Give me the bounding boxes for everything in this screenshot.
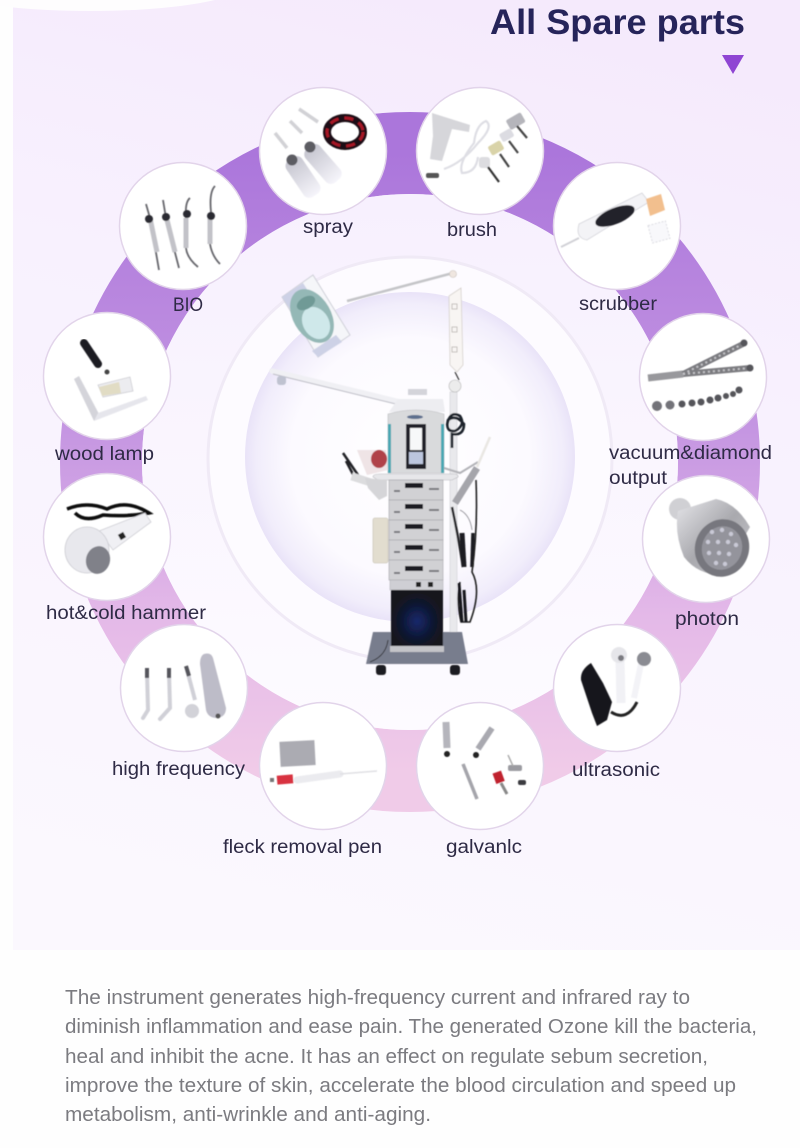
label: hot&cold hammer: hot&cold hammer: [46, 603, 207, 624]
label: wood lamp: wood lamp: [54, 444, 154, 465]
description paragraph: The instrument generates high-frequency current and infrared ray to: [65, 987, 690, 1009]
central lavender disc: [245, 292, 575, 622]
description paragraph: [65, 987, 757, 1126]
faint ring around centre: [208, 257, 612, 661]
fleck removal pen icon: [270, 740, 377, 785]
icon: down triangle: [722, 55, 744, 74]
pole: [450, 392, 457, 634]
hot and cold hammer icon: [65, 505, 151, 577]
galvanic circle: [416, 702, 544, 858]
description paragraph: diminish inflammation and ease pain. The generated Ozone kill the bacteria,: [65, 1016, 757, 1038]
vacuum and diamond circle: [609, 314, 772, 489]
label: photon: photon: [675, 609, 739, 630]
title: All Spare parts: [490, 3, 745, 42]
BIO circle: [120, 162, 246, 316]
label: vacuum&diamond output: [609, 443, 772, 489]
spray circle: [260, 88, 386, 238]
base with wheels: [366, 632, 468, 675]
top-left white arc: [0, 0, 245, 11]
spray icon: [275, 109, 363, 201]
scrubber circle: [554, 162, 680, 315]
description paragraph: improve the texture of skin, accelerate the blood circulation and speed up: [65, 1075, 736, 1097]
photon circle: [642, 476, 770, 630]
label: vacuum&diamond output: vacuum&diamond: [609, 443, 772, 464]
vacuum and diamond icon: [648, 340, 754, 411]
description paragraph: heal and inhibit the acne. It has an effect on regulate sebum secretion,: [65, 1046, 708, 1068]
label: vacuum&diamond output: output: [609, 468, 668, 489]
label: galvanlc: galvanlc: [446, 837, 522, 858]
tray: [373, 474, 458, 480]
purple ring: [101, 153, 719, 771]
control modules: [389, 480, 443, 580]
label: high frequency: high frequency: [112, 759, 246, 780]
left tools holder: [343, 450, 388, 563]
ultrasonic circle: [554, 624, 680, 781]
brush icon: [426, 112, 527, 182]
galvanic icon: [444, 722, 526, 799]
label: BIO: BIO: [173, 295, 203, 316]
high frequency circle: [112, 624, 248, 780]
right cords and handpieces: [444, 414, 490, 622]
ultrasonic icon: [581, 647, 651, 726]
scrubber icon: [561, 193, 670, 247]
inner area of ring: [142, 194, 678, 730]
photon icon: [669, 498, 757, 584]
label: fleck removal pen: fleck removal pen: [223, 837, 382, 858]
label: scrubber: scrubber: [579, 294, 658, 315]
lower panel and screen: [390, 580, 443, 647]
label: spray: spray: [303, 217, 354, 238]
magnifier lamp: [281, 275, 350, 357]
upper console: [388, 410, 444, 473]
wood lamp circle: [44, 312, 170, 465]
label: brush: brush: [447, 220, 497, 241]
description paragraph: metabolism, anti-wrinkle and anti-aging.: [65, 1104, 431, 1126]
magnifier lamp arm: [347, 273, 453, 301]
white lower section: [0, 950, 800, 1148]
wood lamp icon: [74, 343, 148, 421]
steamer arm: [272, 371, 445, 412]
machine: central beauty device: [272, 270, 490, 675]
hot and cold hammer circle: [44, 474, 207, 624]
label: ultrasonic: ultrasonic: [572, 760, 660, 781]
BIO icon: [145, 186, 220, 270]
LED panel arm: [449, 288, 463, 392]
high frequency icon: [143, 654, 226, 719]
fleck removal pen circle: [223, 702, 386, 858]
brush circle: [416, 88, 544, 241]
